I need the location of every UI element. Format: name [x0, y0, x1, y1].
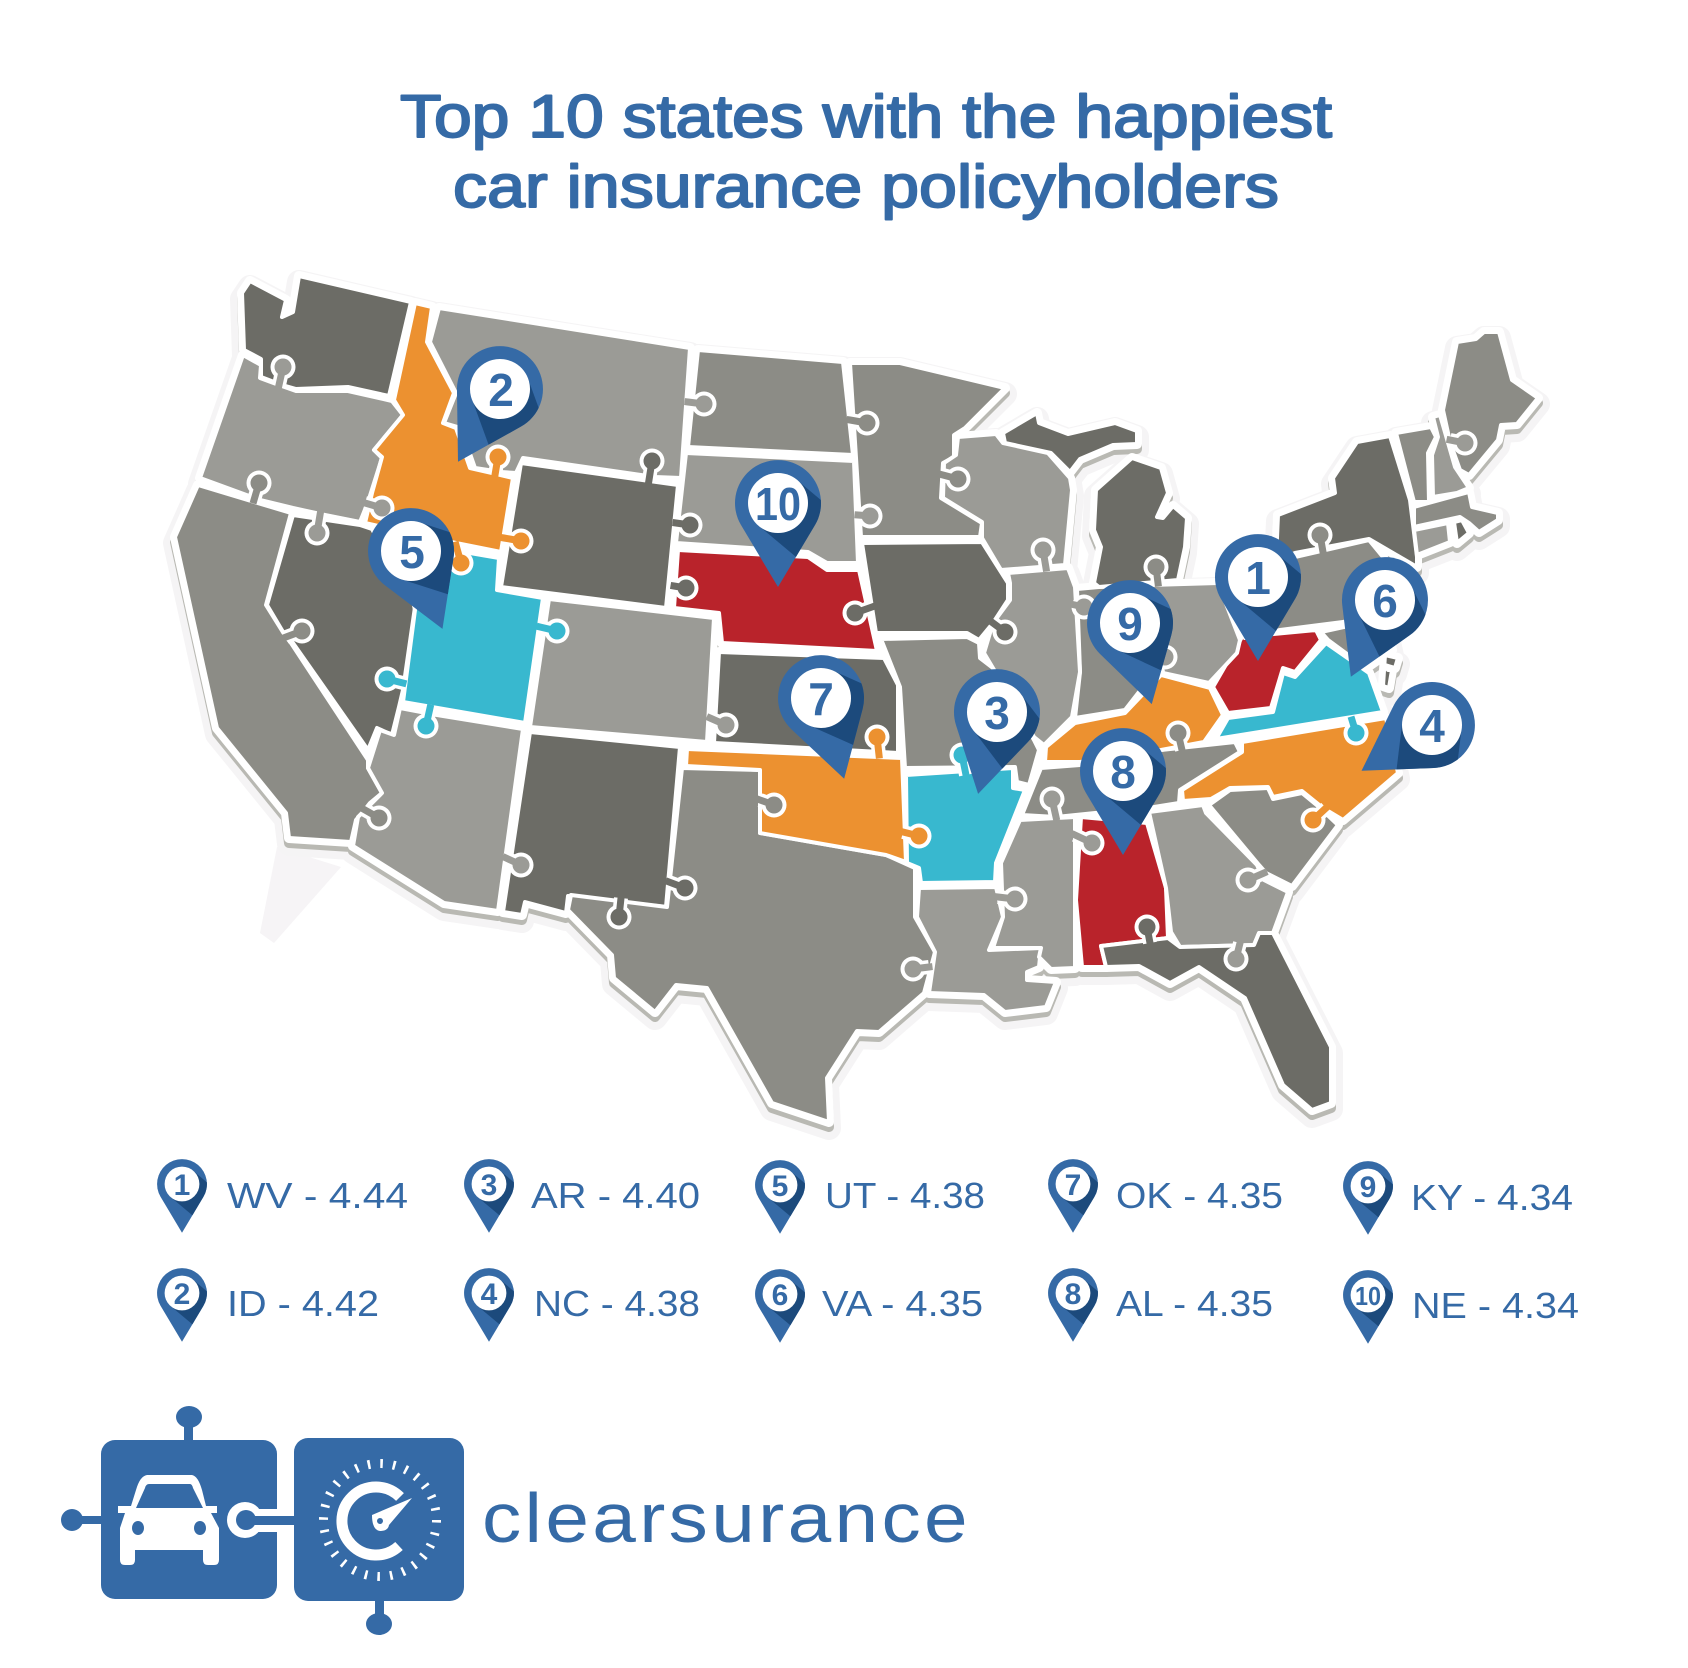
legend item 4 [464, 1268, 700, 1351]
title [400, 83, 1332, 220]
legend item 8: AL - 4.35 [1116, 1283, 1273, 1324]
title: car insurance policyholders [453, 153, 1279, 220]
state: MI upper [1003, 413, 1137, 472]
legend item 3: 3 [481, 1169, 497, 1202]
legend item 6 [755, 1269, 983, 1352]
state: NE [674, 550, 877, 651]
map pin 3: 3 [984, 687, 1010, 739]
map pin 5 [355, 470, 551, 660]
state: OK [686, 749, 906, 862]
legend item 5: UT - 4.38 [825, 1175, 985, 1216]
legend item 9: KY - 4.34 [1411, 1177, 1573, 1218]
legend item 2: 2 [174, 1278, 190, 1311]
map pin 9 [1077, 553, 1263, 731]
legend item 10: 10 [1355, 1281, 1381, 1311]
map pin 10: 10 [755, 478, 801, 530]
legend item 1 [157, 1159, 408, 1242]
state: PA [1240, 540, 1385, 638]
state: WI [943, 434, 1072, 570]
logo icon: car puzzle piece [61, 1406, 277, 1599]
legend item 8: 8 [1065, 1278, 1081, 1311]
map pin 9: 9 [1117, 598, 1143, 650]
legend item 7: 7 [1065, 1169, 1081, 1202]
state: WA [242, 276, 411, 396]
map pin 7 [768, 626, 955, 806]
state: AR [906, 768, 1025, 883]
puzzle tabs [254, 367, 1465, 969]
legend item 7: OK - 4.35 [1116, 1175, 1283, 1216]
logo icon: speedometer puzzle piece [294, 1438, 464, 1635]
map pin 3 [933, 661, 1115, 834]
map shadow and white outline [175, 276, 1538, 1128]
state: MT [430, 308, 690, 478]
state: WV [1213, 630, 1321, 713]
map pin 10 [735, 460, 889, 603]
state: MO [881, 637, 1039, 785]
state: ND [688, 350, 853, 455]
map pin 1: 1 [1245, 552, 1271, 604]
logo: clearsurance [61, 1406, 971, 1635]
title: Top 10 states with the happiest [400, 83, 1332, 150]
map pin 2: 2 [488, 364, 514, 416]
legend item 3: AR - 4.40 [531, 1175, 700, 1216]
state: ID [365, 303, 513, 552]
map pin 1 [1215, 534, 1369, 677]
state: AL [1076, 817, 1168, 967]
legend item 10 [1343, 1270, 1579, 1353]
state: CA [175, 485, 382, 842]
state: NY [1276, 436, 1417, 567]
legend item 2: ID - 4.42 [227, 1283, 379, 1324]
legend item 7 [1048, 1159, 1283, 1242]
legend item 6: VA - 4.35 [822, 1283, 983, 1324]
map pin 8: 8 [1110, 746, 1136, 798]
state: NH [1432, 415, 1469, 497]
state: MN [850, 363, 1005, 537]
map pin 8 [1080, 728, 1234, 871]
state: MI lower [1094, 458, 1187, 587]
legend item 5 [755, 1160, 985, 1243]
legend item 9: 9 [1360, 1171, 1376, 1204]
state: CO [530, 599, 714, 742]
state: SC [1209, 788, 1338, 886]
legend item 1: WV - 4.44 [227, 1175, 408, 1216]
state: IN [1075, 585, 1163, 718]
state: MA [1414, 492, 1498, 532]
map pin 2 [413, 330, 618, 531]
state: NV [267, 515, 415, 750]
legend item 2 [157, 1268, 379, 1351]
logo connector [227, 1502, 296, 1538]
map pin 5: 5 [399, 526, 425, 578]
state: DE [1383, 655, 1398, 688]
state: RI [1454, 520, 1469, 543]
state: TX [568, 768, 935, 1122]
legend item 5: 5 [772, 1170, 788, 1203]
legend item 6: 6 [772, 1279, 788, 1312]
map pin 6: 6 [1372, 575, 1398, 627]
state: KY [1045, 675, 1223, 762]
legend item 1: 1 [174, 1169, 190, 1202]
United States puzzle map [175, 276, 1538, 1122]
state: AZ [353, 708, 523, 911]
legend item 9 [1343, 1161, 1573, 1244]
state: MD [1321, 618, 1392, 668]
state: OH [1150, 583, 1240, 683]
legend item 3 [464, 1159, 700, 1242]
state: UT [400, 545, 543, 723]
legend item 8 [1048, 1268, 1273, 1351]
legend item 4: NC - 4.38 [534, 1283, 700, 1324]
state: VT [1396, 427, 1436, 502]
state: MS [993, 817, 1075, 969]
state: SD [676, 453, 858, 563]
state: IL [984, 568, 1080, 745]
map pin 6 [1305, 543, 1504, 737]
state: GA [1149, 805, 1288, 947]
map pin 4: 4 [1419, 700, 1445, 752]
logo wordmark: clearsurance [482, 1479, 971, 1557]
state: ME [1443, 332, 1538, 475]
state: NC [1182, 718, 1398, 820]
legend item 4: 4 [481, 1278, 498, 1311]
map pin 7: 7 [808, 673, 834, 725]
state: KS [714, 652, 898, 753]
legend item 10: NE - 4.34 [1412, 1285, 1579, 1326]
state: CT [1414, 523, 1450, 555]
state: FL [1101, 933, 1331, 1110]
state: VA [1216, 643, 1383, 739]
state: OR [200, 355, 403, 522]
state: IA [862, 542, 1008, 640]
state: WY [501, 463, 678, 608]
state: TN [1022, 742, 1240, 817]
state: NM [503, 732, 680, 915]
map pin 4 [1325, 666, 1528, 873]
state: LA [917, 887, 1056, 1012]
